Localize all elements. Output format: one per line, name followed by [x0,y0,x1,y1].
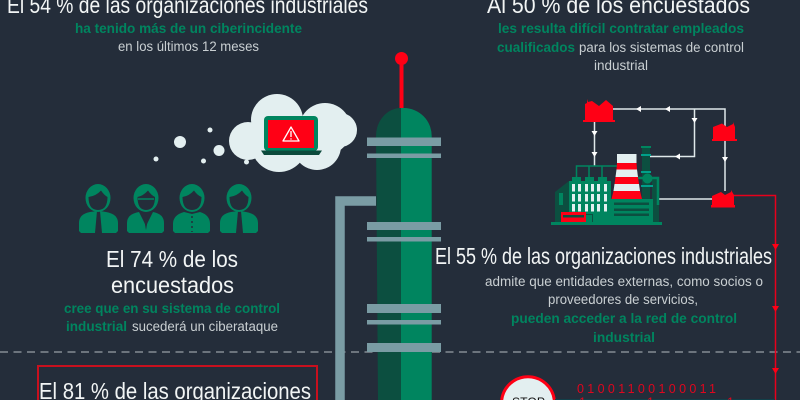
thought bubbles [154,128,249,164]
cooling tower [612,154,642,199]
red control panel [561,212,592,222]
text block: 54 percent [7,0,368,54]
person 3 [173,184,210,233]
text block: 54 percent: ha tenido más de un ciberincidente [75,21,302,36]
panel: 81 percent callout [38,366,317,400]
text block: 54 percent: en los últimos 12 meses [118,39,259,54]
tower [367,108,441,400]
tower bands [367,138,441,352]
icon: stop sign [502,377,554,400]
network lines with arrows [592,106,728,199]
text block: 74 percent: sucederá un ciberataque [132,319,278,334]
main block [569,177,611,222]
text block: 50 percent: para los sistemas de control [579,40,744,55]
text block: 74 percent: cree que en su sistema de control [64,301,280,316]
person 4 [220,184,258,233]
base [551,222,662,225]
icon: red buildings [583,99,737,208]
person 2 [127,184,164,233]
text block: 50 percent: cualificados [497,40,575,55]
pipes [576,166,617,177]
red line with arrows [734,196,779,400]
lower block [611,199,653,222]
text block: 74 percent [64,246,280,334]
text block: 50 percent: les resulta difícil contratar empleados [498,21,744,36]
dark left wing [555,181,569,222]
windows [572,184,607,212]
text block: 50 percent [487,0,750,73]
icon: thought cloud with laptop alert [154,94,357,172]
text block: 74 percent: El 74 % de los [106,246,238,272]
binary data stream: 01001100100011 [577,382,716,396]
text block: 74 percent: industrial [66,319,127,334]
chimney and right wing [637,146,659,222]
icon: four people [79,184,258,233]
binary data stream [555,382,775,400]
icon: factory [551,146,662,225]
text block: 55 percent: industrial [593,330,655,345]
text block: 55 percent: admite que entidades externas, como socios o [485,274,763,289]
text block: 55 percent: pueden acceder a la red de control [511,311,737,326]
text block: 55 percent: proveedores de servicios, [548,292,698,307]
antenna [395,52,408,109]
text block: 50 percent: industrial [594,58,648,73]
cloud [229,94,357,172]
text block: 55 percent [435,243,772,345]
pipe [340,201,376,400]
laptop [261,116,322,155]
text block: 74 percent: encuestados [111,272,234,298]
person 1 [79,184,118,233]
